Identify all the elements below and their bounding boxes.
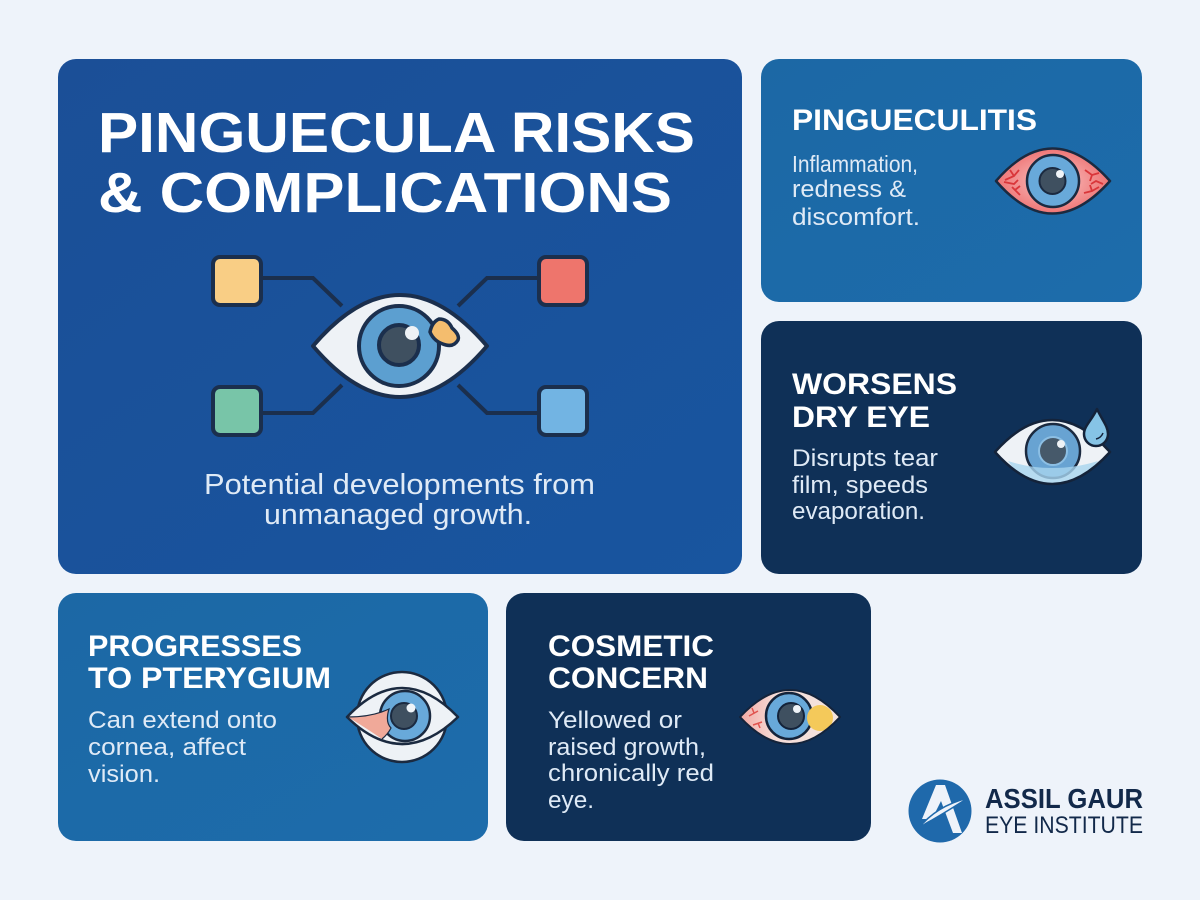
icon: eye with yellow growth (740, 690, 840, 744)
logo text (985, 783, 1143, 839)
panel: cosmetic concern (506, 593, 871, 841)
heading: PROGRESSES (88, 630, 302, 663)
panel: worsens dry eye (761, 321, 1142, 574)
text block (88, 707, 277, 788)
logo text: EYE INSTITUTE (985, 812, 1143, 839)
text block: chronically red (548, 760, 714, 787)
heading (792, 368, 957, 434)
text block: raised growth, (548, 734, 706, 761)
logo text: ASSIL GAUR (985, 783, 1143, 814)
panel: pingueculitis (761, 59, 1142, 302)
icon: pterygium eye (347, 672, 458, 762)
heading (88, 630, 331, 695)
heading: COSMETIC (548, 630, 714, 663)
logo: Assil Gaur Eye Institute (908, 780, 1143, 842)
text block: redness & (792, 176, 906, 203)
panel: main title (58, 59, 742, 574)
title: PINGUECULA RISKS (98, 101, 695, 165)
text block: Inflammation, (792, 151, 918, 177)
text block: Disrupts tear (792, 445, 938, 472)
text block: cornea, affect (88, 734, 246, 761)
title (98, 101, 695, 225)
panel: progresses to pterygium (58, 593, 488, 841)
text block (792, 151, 920, 231)
icon: red inflamed eye (996, 148, 1110, 214)
text block: discomfort. (792, 204, 920, 231)
heading: WORSENS (792, 368, 957, 401)
text block: Can extend onto (88, 707, 277, 734)
text block (792, 445, 938, 525)
text block: Yellowed or (548, 707, 682, 734)
heading: TO PTERYGIUM (88, 662, 331, 695)
text block: film, speeds (792, 472, 928, 499)
diagram: eye with four connected squares (213, 257, 587, 435)
main description: Potential developments from (204, 469, 595, 501)
heading: PINGUECULITIS (792, 104, 1037, 137)
logo mark (908, 780, 972, 842)
main description (204, 469, 595, 531)
heading: DRY EYE (792, 401, 930, 434)
text block (548, 707, 714, 814)
text block: evaporation. (792, 498, 925, 525)
heading (548, 630, 714, 695)
icon: dry eye with tear (995, 409, 1110, 492)
text block: vision. (88, 761, 160, 788)
title: & COMPLICATIONS (98, 161, 672, 225)
heading: CONCERN (548, 662, 708, 695)
main description: unmanaged growth. (264, 499, 532, 531)
text block: eye. (548, 787, 594, 814)
